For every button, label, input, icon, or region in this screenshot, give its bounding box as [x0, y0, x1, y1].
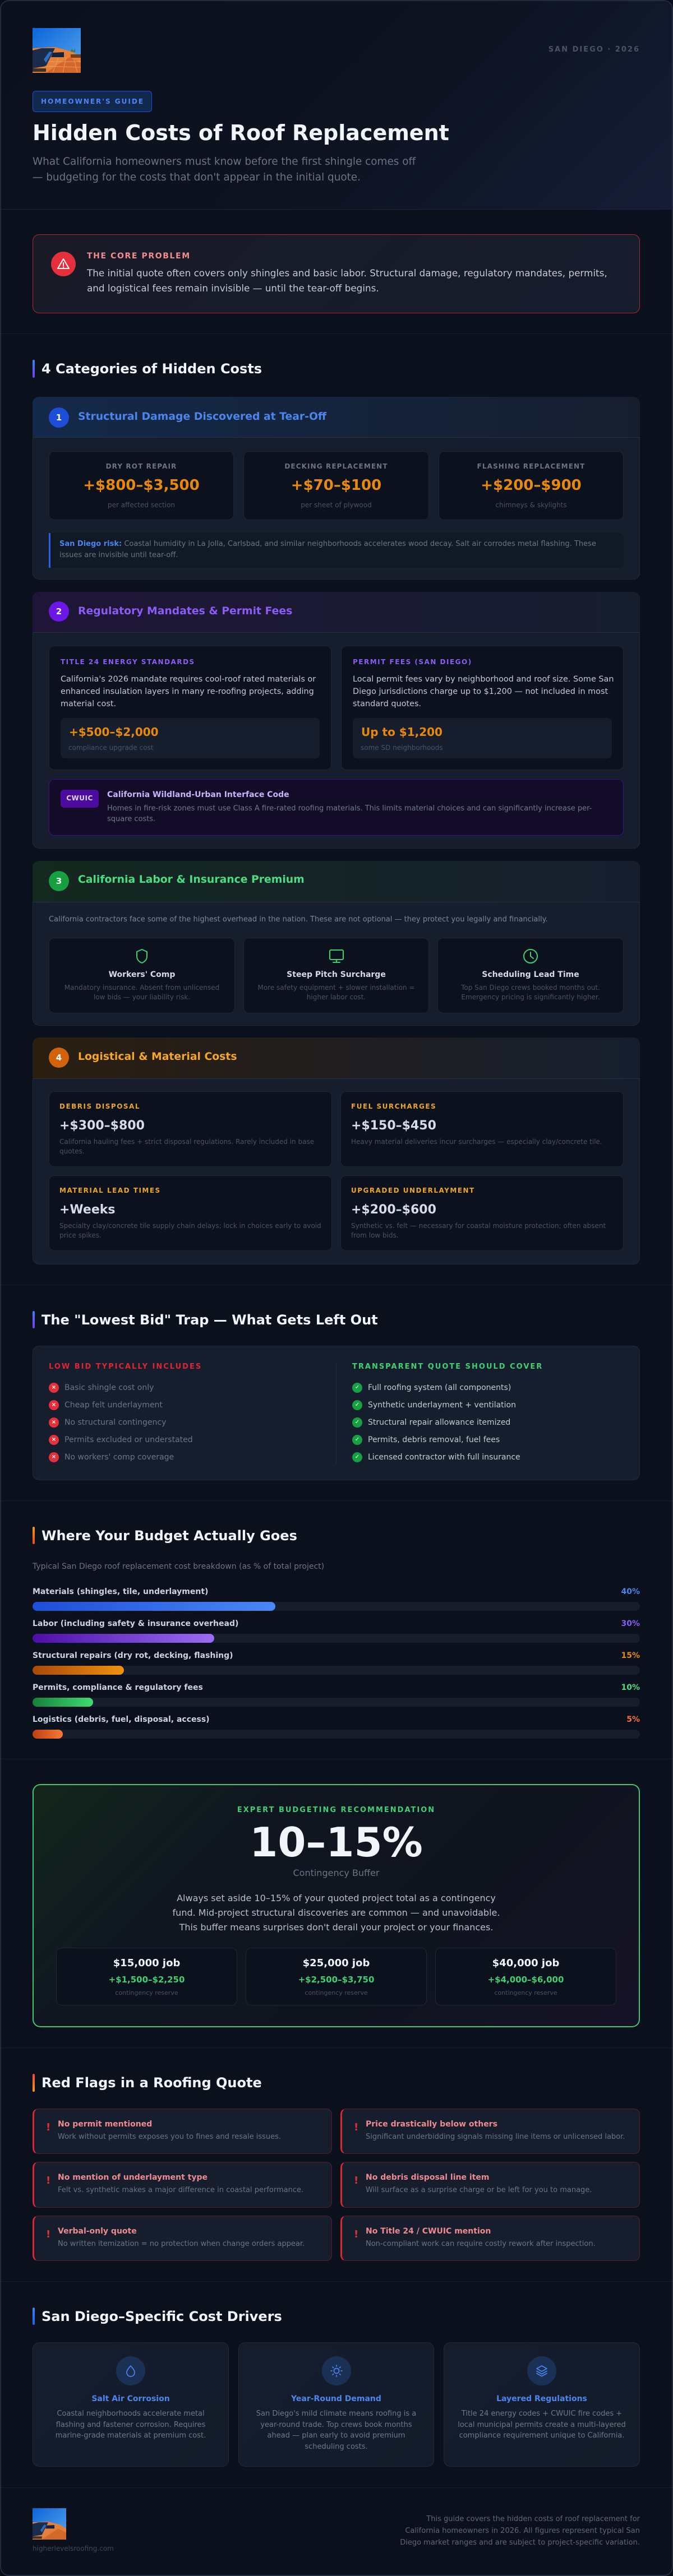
- note: San Diego risk: [49, 533, 624, 568]
- driver: year-round demand: Year-Round Demand: [291, 2394, 381, 2403]
- callout: CWUIC: CWUIC: [66, 794, 93, 802]
- flag: no permit: !: [46, 2121, 50, 2133]
- card: permit fees: standard quotes.: [353, 699, 421, 708]
- card: scheduling: Emergency pricing is significantly higher.: [461, 993, 600, 1001]
- card: Title 24: TITLE 24 ENERGY STANDARDS: [61, 658, 195, 666]
- stat: dry rot repair: [49, 451, 234, 520]
- category 3 header: 3: [56, 876, 62, 886]
- recommendation text: Always set aside 10–15% of your quoted project total as a contingency: [177, 1893, 496, 1903]
- stat: decking replacement: DECKING REPLACEMENT: [284, 462, 388, 470]
- stat: flashing replacement: +$200–$900: [481, 477, 582, 494]
- flag: debris disposal: [340, 2162, 640, 2208]
- driver: year-round demand: year-round trade. Top crews book months: [260, 2420, 412, 2429]
- card: debris disposal: [49, 1091, 332, 1167]
- card: permit fees: PERMIT FEES (SAN DIEGO): [353, 658, 472, 666]
- category 1 header: 1: [56, 413, 62, 423]
- card: material lead times: [49, 1175, 332, 1251]
- bar chart: budget breakdown: 15%: [621, 1651, 640, 1660]
- core problem text: The initial quote often covers only shingles and basic labor. Structural damage, regulatory mandates, permits,: [87, 267, 607, 279]
- example: 15,000 job: +$1,500–$2,250: [109, 1975, 185, 1985]
- transparent quote column: ✓: [355, 1419, 359, 1425]
- driver: year-round demand: ahead — plan early to avoid premium: [268, 2431, 405, 2440]
- card: permit fees: Local permit fees vary by neighborhood and roof size. Some San: [353, 675, 614, 684]
- badge: homeowner's guide: [33, 91, 152, 112]
- transparent quote column: ✓: [355, 1402, 359, 1408]
- footer domain: higherlevelsroofing.com: [33, 2545, 114, 2552]
- flag: underlayment type: [33, 2162, 332, 2208]
- example: 15,000 job: [56, 1948, 237, 2005]
- card: upgraded underlayment: UPGRADED UNDERLAYMENT: [351, 1187, 475, 1194]
- card: debris disposal: California hauling fees + strict disposal regulations. Rarely included in base: [59, 1138, 314, 1146]
- transparent quote column: Structural repair allowance itemized: [368, 1418, 510, 1427]
- card: upgraded underlayment: +$200–$600: [351, 1203, 436, 1217]
- example: 40,000 job: contingency reserve: [494, 1989, 557, 1996]
- example: 25,000 job: $25,000 job: [303, 1957, 370, 1969]
- flag: underlayment type: Felt vs. synthetic makes a major difference in coastal performance.: [58, 2186, 303, 2194]
- transparent quote column: Synthetic underlayment + ventilation: [368, 1401, 516, 1410]
- card: permit fees: [341, 646, 624, 770]
- card: steep pitch: More safety equipment + slower installation =: [257, 984, 415, 992]
- panel: category 4 logistics: [33, 1037, 640, 1264]
- stat: dry rot repair: per affected section: [108, 501, 175, 509]
- example: 40,000 job: $40,000 job: [492, 1957, 559, 1969]
- stat: flashing replacement: [439, 451, 624, 520]
- category 4 header: 4: [56, 1053, 62, 1063]
- card: scheduling: Top San Diego crews booked months out.: [461, 984, 600, 992]
- big number caption: Contingency Buffer: [293, 1868, 379, 1878]
- core problem text: and logistical fees remain invisible — until the tear-off begins.: [87, 282, 379, 294]
- card: workers' comp: [49, 938, 235, 1013]
- header: [0, 0, 673, 210]
- card: Title 24: California's 2026 mandate requires cool-roof rated materials or: [61, 675, 316, 684]
- card: steep pitch: higher labor cost.: [307, 993, 366, 1001]
- heading: 4 categories: 4 Categories of Hidden Costs: [42, 361, 262, 377]
- bar chart: budget breakdown: 10%: [621, 1683, 640, 1692]
- card: scheduling: Scheduling Lead Time: [482, 970, 579, 979]
- core problem label: THE CORE PROBLEM: [87, 252, 191, 261]
- flag: debris disposal: Will surface as a surprise charge or be left for you to manage.: [366, 2186, 592, 2194]
- category 3 header: [33, 861, 640, 902]
- panel: category 2 regulatory: [33, 592, 640, 849]
- category 4 header: Logistical & Material Costs: [78, 1051, 237, 1063]
- driver: salt air corrosion: marine-grade materials at premium cost.: [56, 2431, 206, 2440]
- budget subtitle: Typical San Diego roof replacement cost breakdown (as % of total project): [33, 1562, 324, 1571]
- transparent quote column: ✓: [355, 1454, 359, 1460]
- logo photo: tile roof with solar panels: [33, 28, 81, 73]
- transparent quote column: TRANSPARENT QUOTE SHOULD COVER: [352, 1363, 543, 1371]
- stat: dry rot repair: DRY ROT REPAIR: [106, 462, 177, 470]
- low bid column: Permits excluded or understated: [64, 1435, 193, 1444]
- heading: San Diego drivers: San Diego–Specific Cost Drivers: [42, 2309, 282, 2324]
- transparent quote column: ✓: [355, 1437, 359, 1443]
- panel: category 1 structural damage: [33, 397, 640, 580]
- card: Title 24: +$500–$2,000: [69, 725, 159, 739]
- card: fuel surcharges: FUEL SURCHARGES: [351, 1102, 436, 1110]
- card: scheduling: [437, 938, 624, 1013]
- driver: salt air corrosion: flashing and fastener corrosion. Requires: [56, 2420, 205, 2429]
- flag: no Title 24: No Title 24 / CWUIC mention: [366, 2227, 491, 2236]
- stat: flashing replacement: FLASHING REPLACEMENT: [477, 462, 585, 470]
- card: debris disposal: quotes.: [59, 1147, 85, 1155]
- note: San Diego risk: issues are invisible until tear-off.: [59, 551, 178, 559]
- card: Title 24: compliance upgrade cost: [68, 744, 154, 752]
- card: fuel surcharges: Heavy material deliveries incur surcharges — especially clay/concrete tile.: [351, 1138, 602, 1146]
- category 2 header: Regulatory Mandates & Permit Fees: [78, 605, 292, 617]
- panel: comparison: [33, 1346, 640, 1480]
- big number: 10–15%: [250, 1819, 423, 1866]
- callout: CWUIC: square costs.: [107, 815, 155, 823]
- category 2 header: 2: [56, 606, 62, 617]
- transparent quote column: Permits, debris removal, fuel fees: [368, 1435, 500, 1444]
- category 2 header: [33, 592, 640, 633]
- note: San Diego risk: San Diego risk: Coastal humidity in La Jolla, Carlsbad, and similar neighborhoods accelerates wood decay. Salt air corrodes metal flashing. These: [59, 540, 596, 548]
- flag: price below others: Significant underbidding signals missing line items or unlicensed labor.: [366, 2133, 625, 2141]
- flag: price below others: Price drastically below others: [366, 2120, 497, 2129]
- example: 15,000 job: contingency reserve: [115, 1989, 178, 1996]
- bar chart: budget breakdown: Structural repairs (dry rot, decking, flashing): [33, 1651, 233, 1660]
- flag: verbal-only quote: [33, 2216, 332, 2261]
- bar chart: budget breakdown: 5%: [626, 1715, 640, 1724]
- low bid column: ×: [52, 1402, 56, 1408]
- bar chart: budget breakdown: Logistics (debris, fuel, disposal, access): [33, 1715, 210, 1724]
- low bid column: ×: [52, 1419, 56, 1425]
- callout: CWUIC: Homes in fire-risk zones must use Class A fire-rated roofing materials. This limits material choices and can significantly increase per-: [107, 804, 592, 813]
- stat: decking replacement: per sheet of plywood: [301, 501, 372, 509]
- example: 40,000 job: +$4,000–$6,000: [488, 1975, 564, 1985]
- bar chart: budget breakdown: 40%: [621, 1587, 640, 1596]
- card: steep pitch: Steep Pitch Surcharge: [287, 970, 386, 979]
- card: material lead times: MATERIAL LEAD TIMES: [59, 1187, 161, 1194]
- callout: core problem: [33, 234, 640, 313]
- callout: CWUIC: California Wildland-Urban Interface Code: [107, 790, 289, 799]
- card: debris disposal: +$300–$800: [59, 1119, 145, 1133]
- driver: year-round demand: scheduling costs.: [305, 2443, 368, 2450]
- card: permit fees: Up to $1,200: [361, 725, 442, 739]
- footer disclaimer: [400, 2514, 640, 2547]
- card: fuel surcharges: [340, 1091, 624, 1167]
- card: material lead times: Specialty clay/concrete tile supply chain delays; lock in choices early to avoid: [59, 1222, 321, 1230]
- category 1 header: [33, 397, 640, 438]
- stat: decking replacement: [243, 451, 429, 520]
- low bid column: [49, 1363, 202, 1462]
- low bid column: ×: [52, 1454, 56, 1460]
- card: Title 24: enhanced insulation layers in many re-roofing projects, adding: [61, 687, 314, 696]
- bar chart: budget breakdown: Labor (including safety & insurance overhead): [33, 1619, 238, 1628]
- stat: dry rot repair: +$800–$3,500: [83, 477, 200, 494]
- footer disclaimer: Diego market ranges and are subject to project-specific variation.: [400, 2538, 640, 2547]
- flag: price below others: !: [354, 2121, 358, 2133]
- card: upgraded underlayment: Synthetic vs. felt — necessary for coastal moisture protection; often absent: [351, 1222, 606, 1230]
- subtitle: What California homeowners must know before the first shingle comes off: [33, 156, 416, 168]
- driver: layered regulations: local municipal permits create a multi-layered: [458, 2420, 626, 2429]
- example: 25,000 job: [246, 1948, 427, 2005]
- heading: budget: Where Your Budget Actually Goes: [42, 1528, 297, 1544]
- example: 40,000 job: [435, 1948, 616, 2005]
- driver: salt air corrosion: [33, 2342, 229, 2467]
- card: steep pitch: [243, 938, 429, 1013]
- core problem text: [86, 267, 607, 294]
- card: fuel surcharges: +$150–$450: [351, 1119, 436, 1133]
- category 3 header: California Labor & Insurance Premium: [78, 874, 305, 886]
- card: permit fees: Diego jurisdictions charge up to $1,200 — not included in most: [353, 687, 608, 696]
- transparent quote column: Full roofing system (all components): [368, 1383, 511, 1392]
- panel: category 3 labor: [33, 861, 640, 1026]
- low bid column: ×: [52, 1384, 56, 1391]
- low bid column: No workers' comp coverage: [64, 1453, 174, 1462]
- title: Hidden Costs of Roof Replacement: [33, 121, 449, 145]
- flag: debris disposal: !: [354, 2175, 358, 2186]
- flag: verbal-only quote: !: [46, 2228, 50, 2240]
- example: 25,000 job: contingency reserve: [305, 1989, 368, 1996]
- stat: decking replacement: +$70–$100: [291, 477, 381, 494]
- card: permit fees: some SD neighborhoods: [361, 744, 443, 752]
- card: workers' comp: Workers' Comp: [109, 970, 175, 979]
- badge text: HOMEOWNER'S GUIDE: [41, 98, 144, 105]
- panel: expert budgeting recommendation: [33, 1784, 640, 2027]
- low bid column: No structural contingency: [64, 1418, 166, 1427]
- card: material lead times: price spikes.: [59, 1231, 102, 1239]
- icon: warning: [51, 252, 76, 276]
- driver: layered regulations: compliance requirement unique to California.: [459, 2431, 624, 2440]
- driver: year-round demand: [238, 2342, 434, 2467]
- intro text: California contractors face some of the highest overhead in the nation. These are not optional — they protect you legally and financially.: [49, 915, 548, 924]
- card: Title 24: material cost.: [61, 699, 116, 708]
- card: workers' comp: low bids — your liability risk.: [94, 993, 190, 1001]
- card: upgraded underlayment: [340, 1175, 624, 1251]
- category 1 header: Structural Damage Discovered at Tear-Off: [78, 411, 326, 423]
- category 4 header: [33, 1037, 640, 1079]
- flag: no Title 24: [340, 2216, 640, 2261]
- driver: salt air corrosion: Coastal neighborhoods accelerate metal: [57, 2410, 205, 2418]
- flag: debris disposal: No debris disposal line item: [366, 2173, 489, 2182]
- subtitle: — budgeting for the costs that don't appear in the initial quote.: [33, 172, 361, 183]
- callout: CWUIC: [49, 779, 624, 836]
- card: upgraded underlayment: from low bids.: [351, 1231, 399, 1239]
- flag: no Title 24: Non-compliant work can require costly rework after inspection.: [366, 2240, 596, 2248]
- driver: layered regulations: Layered Regulations: [496, 2394, 587, 2403]
- low bid column: Cheap felt underlayment: [64, 1401, 163, 1410]
- example: 25,000 job: +$2,500–$3,750: [298, 1975, 374, 1985]
- bar chart: budget breakdown: Permits, compliance & regulatory fees: [33, 1683, 203, 1692]
- card: Title 24: [49, 646, 331, 770]
- flag: no permit: Work without permits exposes you to fines and resale issues.: [58, 2133, 281, 2141]
- flag: verbal-only quote: No written itemization = no protection when change orders appear.: [58, 2240, 305, 2248]
- card: workers' comp: Mandatory insurance. Absent from unlicensed: [64, 984, 219, 992]
- low bid column: Basic shingle cost only: [64, 1383, 154, 1392]
- example: 15,000 job: $15,000 job: [113, 1957, 180, 1969]
- flag: no permit: No permit mentioned: [58, 2120, 152, 2129]
- flag: underlayment type: No mention of underlayment type: [58, 2173, 208, 2182]
- transparent quote column: Licensed contractor with full insurance: [368, 1453, 520, 1462]
- subtitle: [33, 156, 416, 183]
- footer disclaimer: California homeowners in 2026. All figures represent typical San: [405, 2527, 640, 2535]
- recommendation label: EXPERT BUDGETING RECOMMENDATION: [237, 1806, 435, 1814]
- bar chart: budget breakdown: Materials (shingles, tile, underlayment): [33, 1587, 208, 1596]
- low bid column: LOW BID TYPICALLY INCLUDES: [49, 1363, 202, 1371]
- heading: lowest bid trap: The "Lowest Bid" Trap — What Gets Left Out: [42, 1312, 378, 1328]
- transparent quote column: ✓: [355, 1384, 359, 1391]
- recommendation text: This buffer means surprises don't derail your project or your finances.: [179, 1922, 493, 1933]
- low bid column: ×: [52, 1437, 56, 1443]
- flag: verbal-only quote: Verbal-only quote: [58, 2227, 137, 2236]
- footer logo photo: [33, 2508, 66, 2540]
- flag: underlayment type: !: [46, 2175, 50, 2186]
- transparent quote column: [352, 1363, 543, 1462]
- flag: no permit: [33, 2109, 332, 2154]
- flag: no Title 24: !: [354, 2228, 358, 2240]
- bar chart: budget breakdown: 30%: [621, 1619, 640, 1628]
- driver: salt air corrosion: Salt Air Corrosion: [91, 2394, 170, 2403]
- driver: layered regulations: Title 24 energy codes + CWUIC fire codes +: [462, 2410, 622, 2418]
- card: debris disposal: DEBRIS DISPOSAL: [59, 1102, 140, 1110]
- stat: flashing replacement: chimneys & skylights: [495, 501, 567, 509]
- bar chart: budget breakdown: [33, 1587, 640, 1739]
- driver: year-round demand: San Diego's mild climate means roofing is a: [256, 2410, 416, 2418]
- location and year label: SAN DIEGO · 2026: [548, 45, 640, 54]
- footer disclaimer: This guide covers the hidden costs of roof replacement for: [426, 2514, 640, 2523]
- flag: price below others: [340, 2109, 640, 2154]
- recommendation text: [173, 1893, 500, 1933]
- heading: red flags: Red Flags in a Roofing Quote: [42, 2075, 262, 2091]
- recommendation text: fund. Mid-project structural discoveries are common — and unavoidable.: [173, 1907, 500, 1918]
- card: material lead times: +Weeks: [59, 1203, 115, 1217]
- driver: layered regulations: [444, 2342, 640, 2467]
